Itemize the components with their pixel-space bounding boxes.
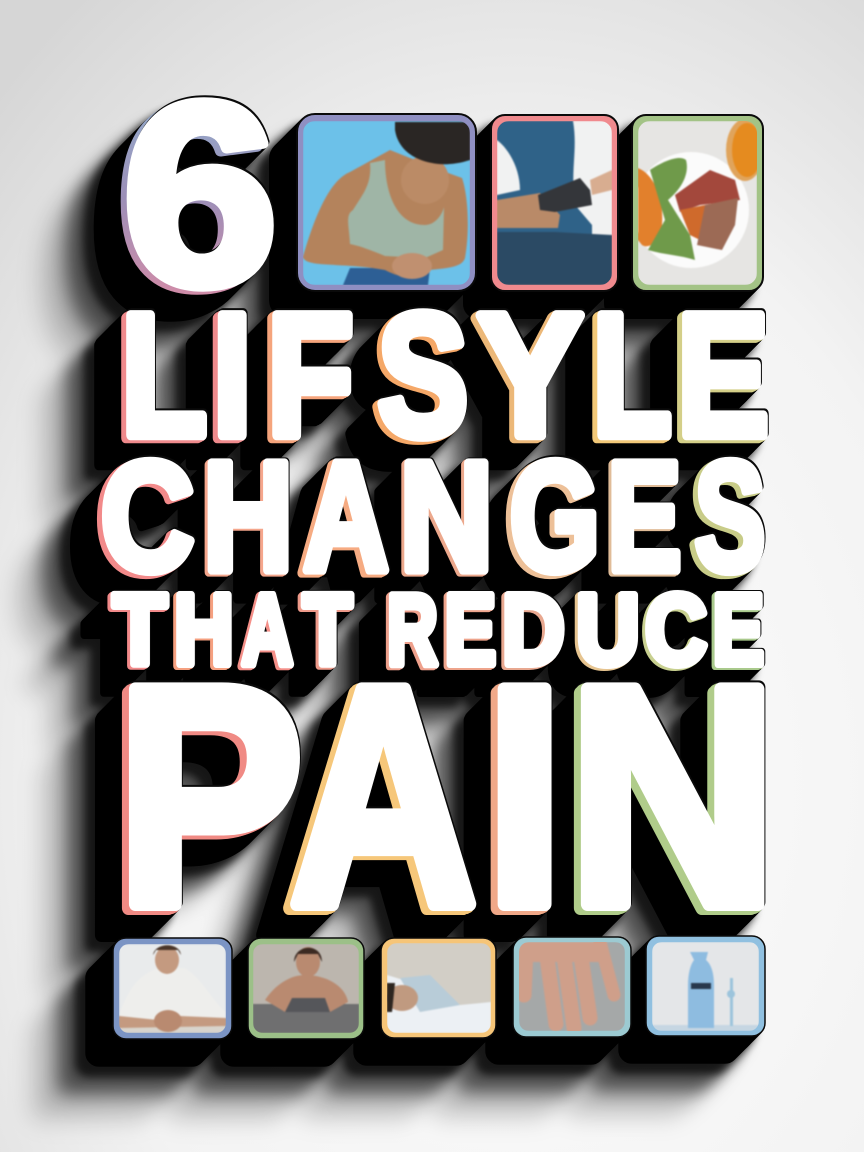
line: LIFSYLE: F (267, 277, 354, 472)
line: PAIN: P (116, 622, 303, 970)
line: THAT REDUCE: A (242, 574, 293, 686)
line: THAT REDUCE: E (444, 573, 496, 685)
photo: woman holding stomach (297, 114, 476, 291)
line: LIFSYLE: S (378, 279, 468, 473)
numeral 6: 6 (122, 50, 278, 340)
photo: blood pressure cuff (491, 115, 618, 291)
line: LIFSYLE: I (212, 277, 252, 472)
line: THAT REDUCE: C (645, 574, 707, 685)
line: LIFSYLE (121, 277, 769, 473)
line: CHANGES: E (607, 430, 682, 603)
line: THAT REDUCE: T (303, 575, 352, 686)
line: CHANGES: A (303, 431, 389, 604)
line: PAIN: I (485, 623, 564, 971)
line: CHANGES: H (203, 429, 293, 603)
line: CHANGES: S (694, 430, 766, 604)
line: CHANGES: C (100, 430, 194, 604)
line: LIFSYLE: L (121, 278, 207, 472)
line: CHANGES: G (510, 431, 600, 604)
poster content with long shadow (100, 50, 777, 1039)
line: THAT REDUCE: D (502, 573, 565, 685)
photo: hand with swollen fingers (513, 937, 631, 1037)
line: PAIN: N (568, 621, 777, 970)
photo: person lying in bed (381, 938, 496, 1038)
line: CHANGES: N (400, 430, 493, 604)
line: PAIN (116, 621, 777, 971)
line: CHANGES (100, 429, 766, 604)
line: PAIN: A (290, 622, 477, 970)
line: THAT REDUCE: U (576, 575, 640, 686)
numeral 6: 6 (116, 53, 272, 343)
photo: woman in pain on bed (248, 938, 364, 1039)
line: LIFSYLE: L (592, 278, 672, 472)
line: THAT REDUCE: H (174, 575, 234, 686)
line: LIFSYLE: E (677, 279, 769, 473)
line: LIFSYLE: Y (478, 279, 583, 473)
line: THAT REDUCE: R (387, 575, 438, 686)
photo: plate of food (632, 115, 764, 291)
line: THAT REDUCE: T (113, 575, 167, 686)
photo: man at desk (113, 938, 232, 1039)
line: THAT REDUCE: E (712, 573, 764, 685)
photo: water bottle (646, 936, 765, 1036)
line: THAT REDUCE (113, 573, 764, 686)
